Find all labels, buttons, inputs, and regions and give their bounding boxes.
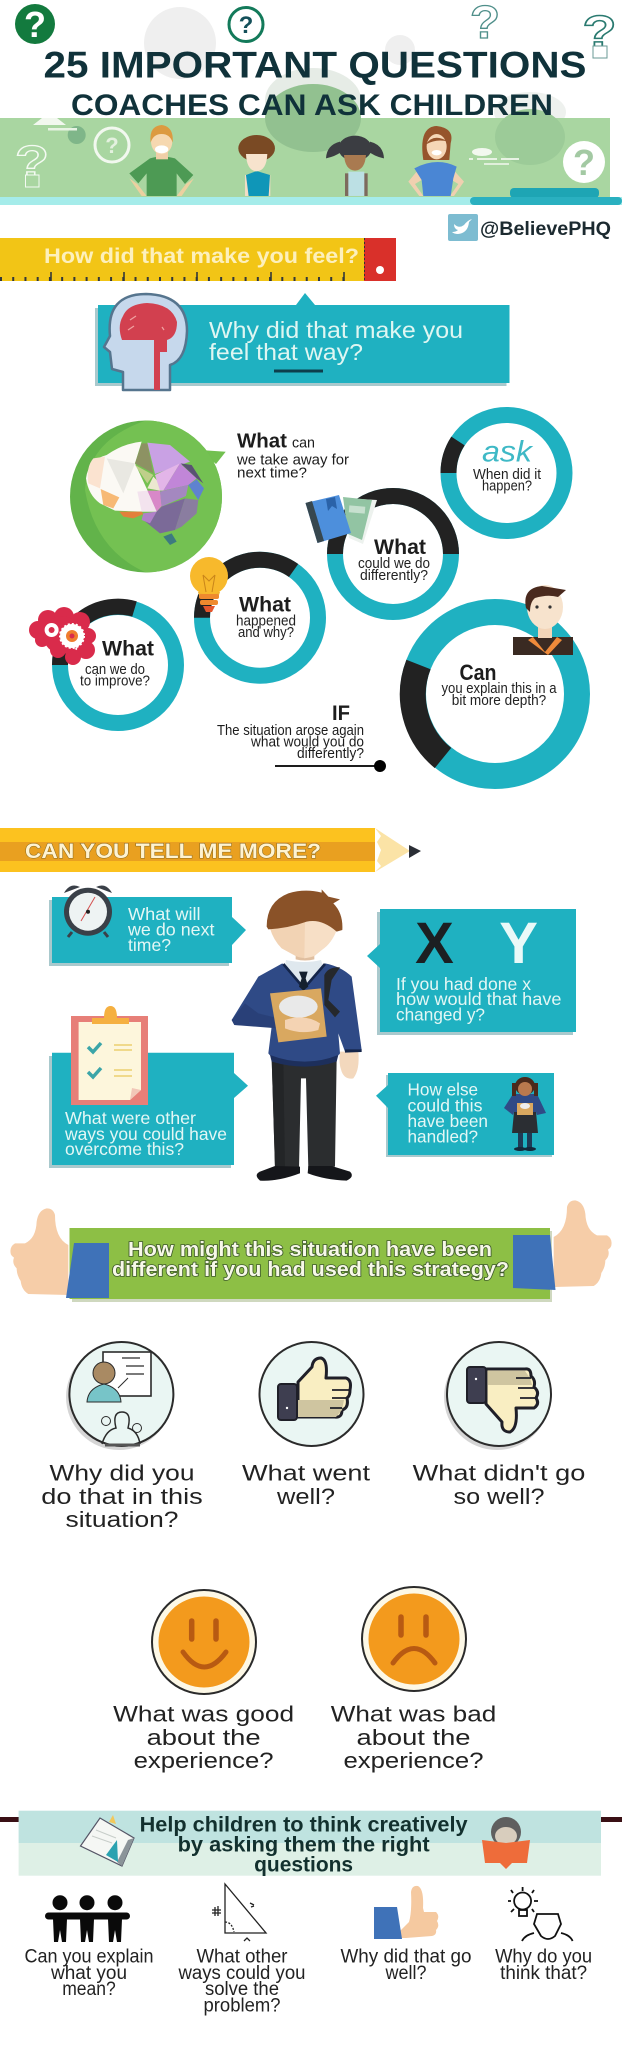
- ring: what could we do differently: could we do: [358, 555, 430, 572]
- text: what can we take away: next time?: [237, 464, 307, 481]
- panel: what didn't go so well: [413, 1342, 585, 1509]
- panel: what other ways could you solve the problem: ways could you: [178, 1963, 306, 1984]
- figure: coach man: [129, 125, 194, 196]
- panel: what will we do next time: we do next: [127, 920, 215, 940]
- panel: what were other ways: [49, 1006, 248, 1168]
- panel: what will we do next time: [49, 885, 246, 966]
- icon: outlined question mark circle: ?: [239, 12, 253, 39]
- panel: what went well: well?: [276, 1484, 335, 1509]
- banner: how might this situation have been different: different if you had used this strategy?: [112, 1259, 509, 1281]
- panel: what went well: [242, 1342, 370, 1509]
- icon: head with brain: [104, 294, 187, 390]
- panel: can you explain what you mean: Can you explain: [24, 1947, 154, 1968]
- icon: white egg question mark: [563, 141, 605, 183]
- icon: left thumbs up: [10, 1208, 109, 1298]
- title: COACHES CAN ASK CHILDREN: [71, 89, 553, 122]
- figure: student with book: [232, 889, 362, 1181]
- twitter handle: @BelievePHQ: [480, 219, 611, 240]
- sweater: [232, 960, 362, 1067]
- banner: help children to think creatively: Help children to think creatively: [140, 1813, 468, 1837]
- ring: ask when did it happen: [448, 415, 564, 531]
- panel: what will we do next time: time?: [128, 935, 171, 955]
- ring: what can we do to improve: What: [102, 638, 154, 661]
- icon: person with light bulb: [508, 1887, 573, 1941]
- pencil banner: can you tell me more: CAN YOU TELL ME MORE?: [25, 840, 321, 863]
- panel: what was bad: experience?: [344, 1748, 484, 1773]
- icon: man portrait: [513, 585, 573, 655]
- ring: what can we do to improve: can we do: [85, 661, 145, 678]
- ring: ask when did it happen: When did it: [473, 466, 542, 483]
- panel: what will we do next time: What will: [128, 904, 201, 924]
- icon: right thumbs up: [513, 1200, 612, 1290]
- banner: how might this situation have been different: How might this situation have been: [128, 1239, 492, 1261]
- panel: how else could this have been handled: handled?: [408, 1127, 478, 1147]
- speech bubble with brain: [70, 420, 226, 572]
- panel: why did that go well: [340, 1886, 472, 1984]
- icon: white egg question mark: ?: [573, 142, 595, 183]
- text: what can we take away: What: [237, 431, 287, 453]
- panel: x y question: how would that have: [396, 989, 562, 1009]
- panel: what didn't go so well: What didn't go: [413, 1461, 585, 1486]
- panel: what was bad: What was bad: [331, 1702, 496, 1727]
- panel: why did that make you feel that way: [95, 293, 510, 390]
- banner: how might this situation have been different: [10, 1200, 612, 1302]
- panel: what was bad: about the: [356, 1725, 470, 1750]
- panel: what was bad: [331, 1587, 496, 1773]
- icon: books: [306, 495, 377, 544]
- text: if the situation arose again: IF: [332, 702, 350, 725]
- panel: why did that make you feel that way: Why did that make you: [209, 317, 463, 343]
- panel: how else could this have been handled: How else: [408, 1080, 478, 1100]
- panel: what were other ways: ways you could have: [64, 1124, 227, 1144]
- banner background: [0, 84, 622, 205]
- panel: what other ways could you solve the problem: solve the: [205, 1979, 279, 2000]
- icon: outline question mark far right: ?: [582, 6, 616, 58]
- panel: why did you do that: do that in this: [41, 1484, 203, 1509]
- text: if the situation arose again: differently?: [297, 745, 364, 762]
- ruler banner: how did that make you feel: How did that make you feel?: [44, 244, 359, 268]
- panel: why did that make you feel that way: feel that way?: [209, 339, 363, 365]
- icon: white ring question mark: ?: [105, 133, 119, 158]
- panel: can you explain what you mean: mean?: [62, 1979, 116, 2000]
- text: what can we take away: we take away for: [236, 451, 349, 468]
- icon: notebook: [80, 1815, 134, 1866]
- panel: x y question: changed y?: [396, 1005, 485, 1025]
- panel: x y question: Y: [499, 911, 538, 976]
- twitter handle: [448, 214, 611, 241]
- figure: small schoolgirl: [504, 1077, 546, 1151]
- panel: why did that go well: well?: [385, 1963, 426, 1984]
- panel: why do you think that: [495, 1887, 592, 1984]
- ring: what happened and why: [202, 560, 318, 676]
- panel: how else could this have been handled: could this: [408, 1096, 483, 1116]
- ring: ask when did it happen: happen?: [482, 478, 532, 495]
- icon: solid question mark circle: [15, 4, 55, 45]
- icon: red gears cloud: [29, 607, 96, 665]
- panel: why did you do that: situation?: [66, 1507, 178, 1532]
- head: [267, 889, 342, 958]
- ring: what can we do to improve: [60, 607, 176, 723]
- icon: white ring question mark: [95, 128, 129, 162]
- icon: smiley face: [152, 1590, 256, 1694]
- figure: boy: [238, 135, 275, 196]
- ring: ask when did it happen: ask: [482, 436, 534, 469]
- ruler banner: how did that make you feel: [0, 238, 396, 281]
- icon: clipboard checklist: [71, 1006, 148, 1105]
- icon: light bulb: [190, 557, 228, 612]
- panel: can you explain what you mean: what you: [50, 1963, 127, 1984]
- ring: can you explain this: bit more depth?: [452, 692, 546, 709]
- panel: what was good: [113, 1590, 294, 1773]
- figure: girl: [326, 136, 384, 196]
- icon: low poly brain: [86, 442, 204, 545]
- icon: three people: [45, 1895, 130, 1942]
- text: what can we take away: can: [292, 436, 315, 452]
- text: if the situation arose again: [217, 702, 386, 772]
- panel: how else could this have been handled: have been: [408, 1111, 488, 1131]
- header section: [0, 0, 622, 241]
- text: if the situation arose again: what would you do: [250, 734, 364, 751]
- icon: white question mark outline: ?: [15, 136, 49, 188]
- ring: can you explain this: Can: [460, 660, 496, 685]
- icon: child reading: [482, 1817, 530, 1869]
- ring: what could we do differently: [335, 496, 451, 612]
- book and hand: [270, 988, 327, 1042]
- title: 25 IMPORTANT QUESTIONS: [44, 44, 586, 86]
- panel: what were other ways: overcome this?: [65, 1139, 184, 1159]
- panel: x y question: If you had done x: [396, 974, 531, 994]
- panel: why did you do that: Why did you: [50, 1461, 194, 1486]
- icon: alarm clock: [64, 885, 112, 937]
- icon: sad face: [362, 1587, 466, 1691]
- banner: help children to think creatively: questions: [254, 1853, 353, 1877]
- legs: [257, 1058, 352, 1181]
- banner: help children to think creatively: [0, 1811, 622, 1877]
- pencil banner: can you tell me more: [0, 828, 421, 872]
- icon: teacher circle: [66, 1342, 173, 1450]
- title: [44, 44, 586, 122]
- panel: what didn't go so well: so well?: [454, 1484, 544, 1509]
- ring: can you explain this: [413, 612, 577, 776]
- panel: what was good: experience?: [134, 1748, 274, 1773]
- panel: why do you think that: Why do you: [495, 1947, 592, 1968]
- ring: what could we do differently: differently?: [360, 567, 428, 584]
- panel: how else could this have been handled: [376, 1073, 554, 1157]
- ring: what can we do to improve: to improve?: [80, 673, 150, 690]
- panel: can you explain what you mean: [24, 1895, 154, 2000]
- panel: what was good: about the: [147, 1725, 261, 1750]
- icon: solid question mark circle: ?: [24, 4, 46, 45]
- panel: what other ways could you solve the problem: [178, 1884, 306, 2017]
- panel: x y question: X: [415, 911, 454, 976]
- panel: what other ways could you solve the problem: What other: [196, 1947, 288, 1968]
- ring: what could we do differently: What: [374, 536, 426, 559]
- panel: what were other ways: What were other: [65, 1108, 196, 1128]
- panel: why do you think that: think that?: [500, 1963, 587, 1984]
- ring: what happened and why: happened: [236, 613, 296, 630]
- panel: why did that go well: Why did that go: [340, 1947, 472, 1968]
- ring: what happened and why: and why?: [238, 624, 294, 641]
- panel: why did you do that: [41, 1342, 203, 1532]
- figure: woman: [408, 126, 464, 196]
- banner: help children to think creatively: by asking them the right: [178, 1833, 430, 1857]
- icon: thumbs up with cuff: [374, 1886, 438, 1939]
- icon: thumbs up circle: [260, 1342, 364, 1446]
- icon: thumbs down circle: [444, 1342, 551, 1450]
- panel: what was good: What was good: [113, 1702, 294, 1727]
- text: if the situation arose again: The situation arose again: [217, 722, 364, 739]
- ring: what happened and why: What: [239, 594, 291, 617]
- panel: what other ways could you solve the problem: problem?: [204, 1996, 280, 2017]
- text: what can we take away: [236, 431, 349, 481]
- icon: outlined question mark circle: [229, 8, 263, 42]
- panel: questions ring cluster: [29, 415, 577, 776]
- ring: can you explain this: you explain this in a: [442, 680, 557, 697]
- panel: what went well: What went: [242, 1461, 370, 1486]
- icon: triangle: [212, 1884, 266, 1941]
- panel: x y question: [367, 909, 576, 1035]
